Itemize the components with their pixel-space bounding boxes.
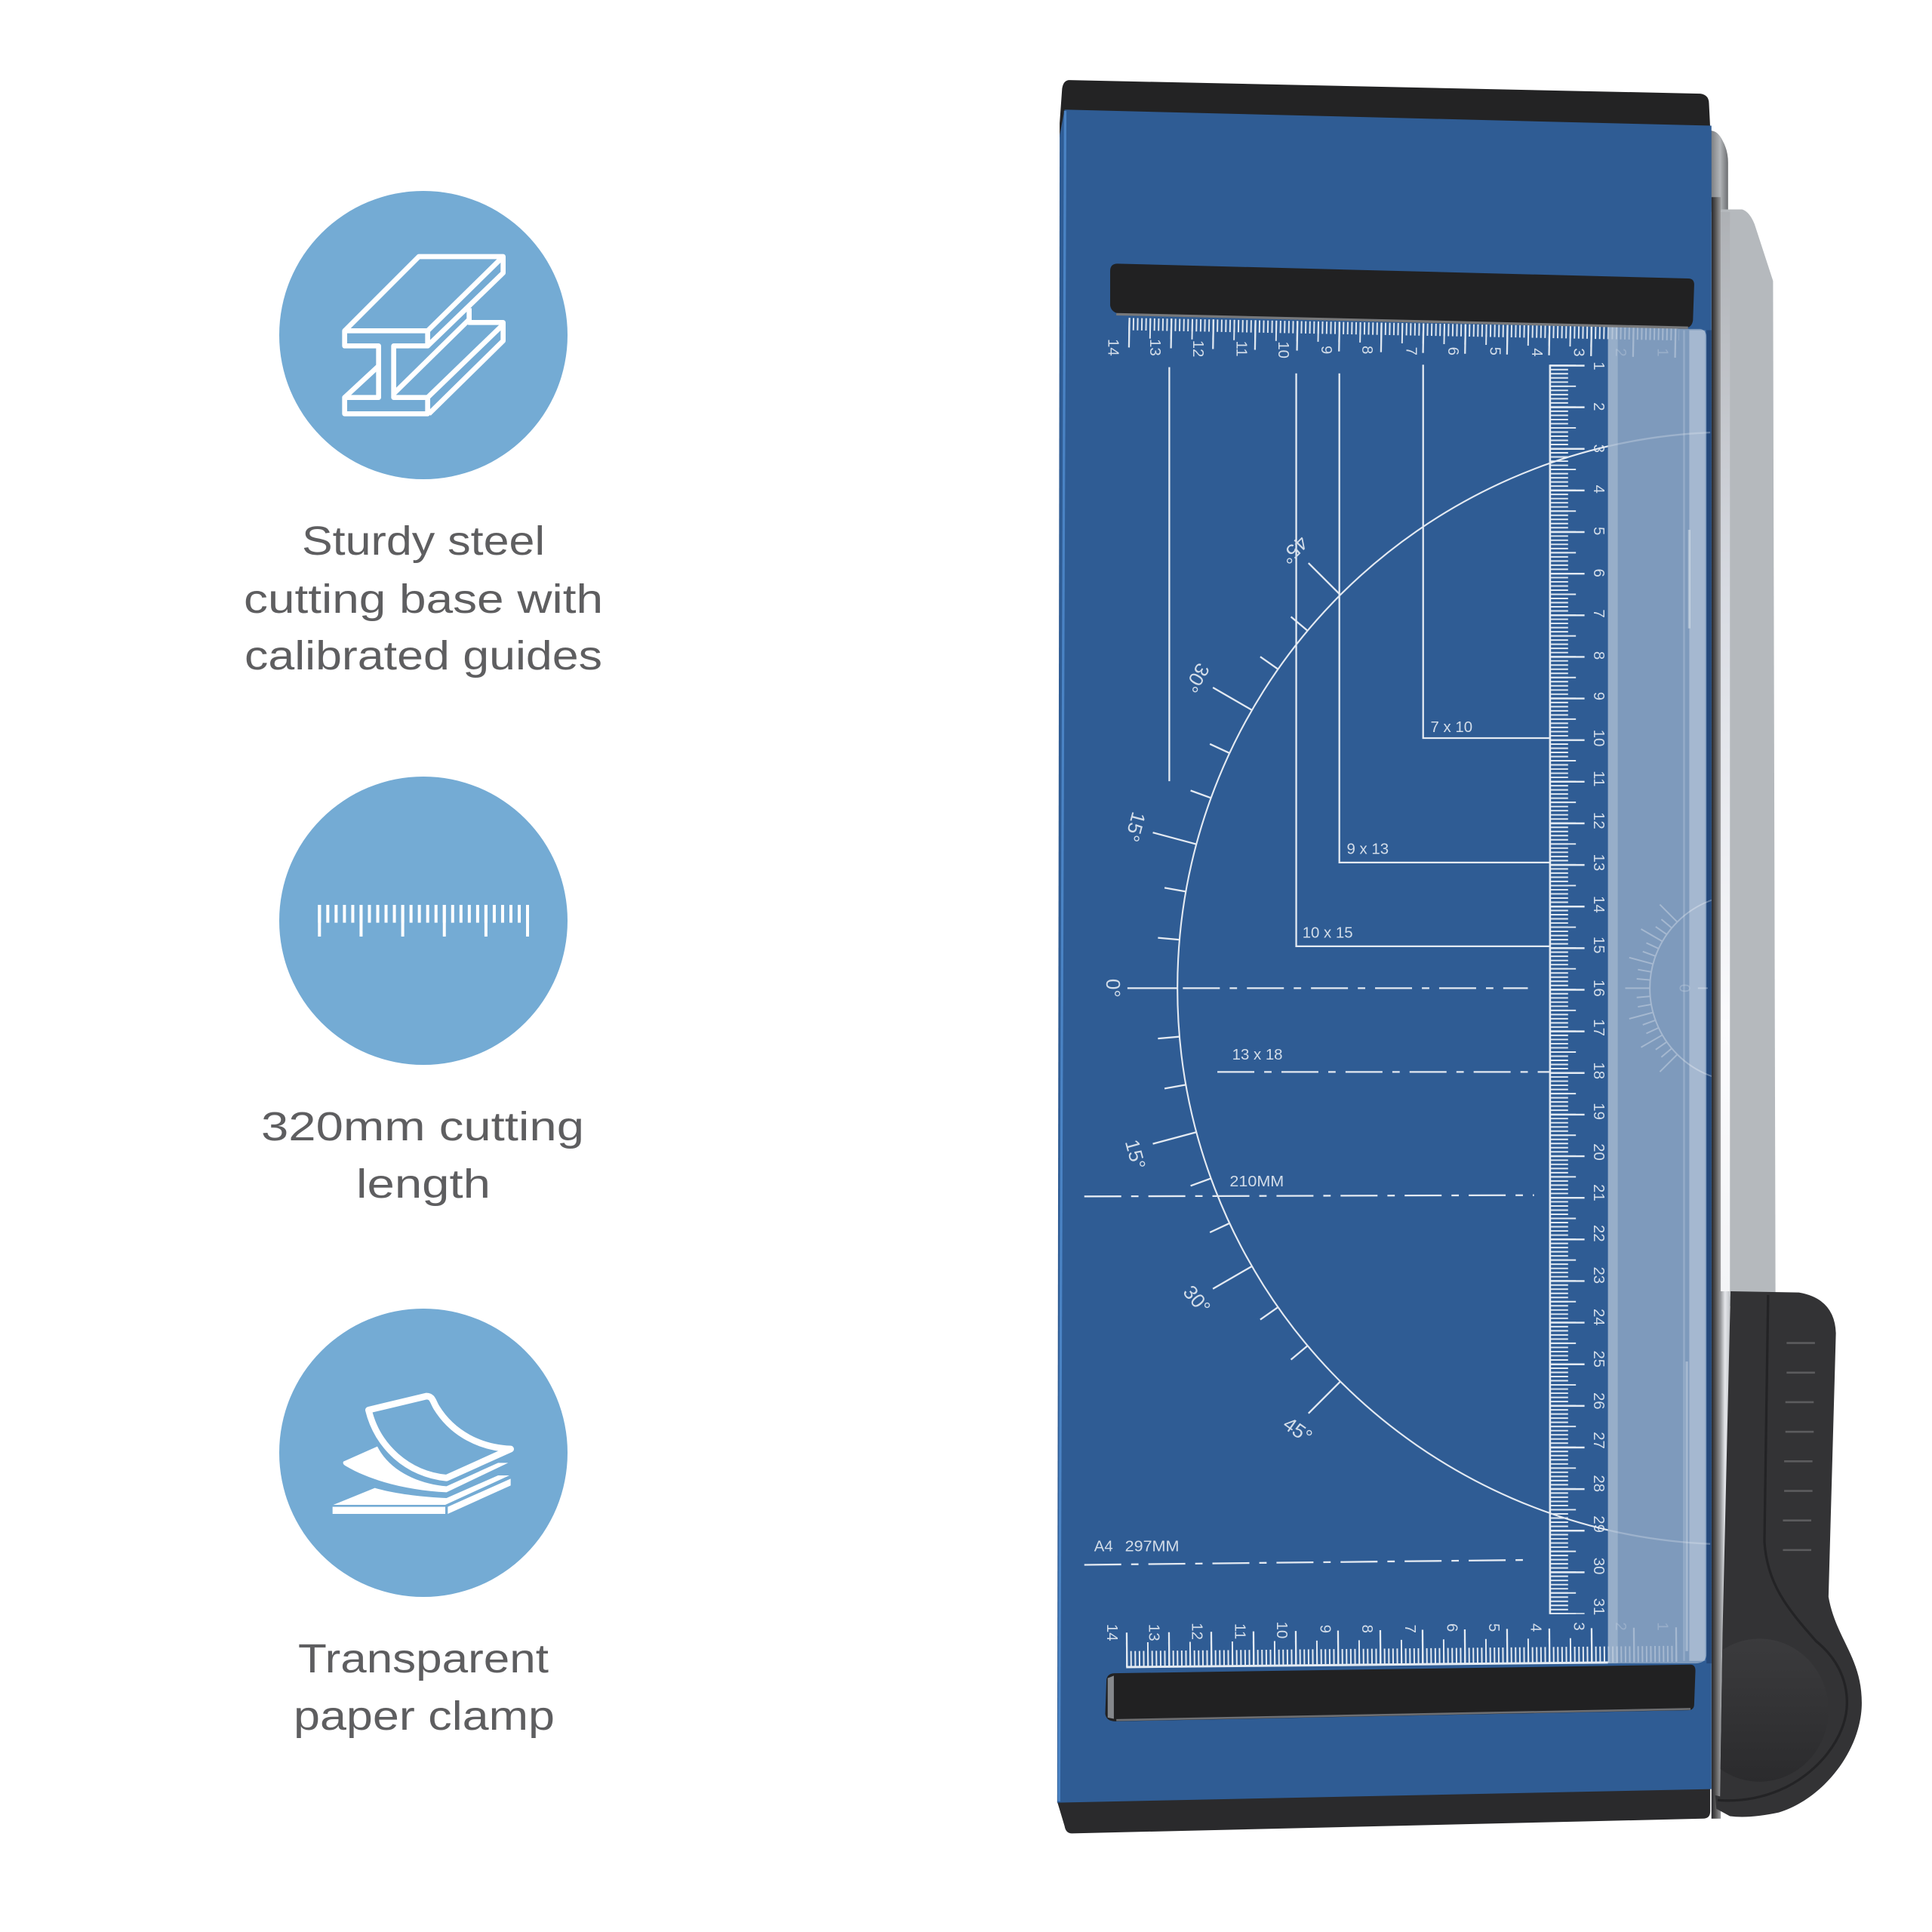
handle thumb dimple [1721,1650,1722,1769]
protractor angle labels: 45° [1279,1412,1316,1447]
vertical ruler numbers: 10 [1590,730,1607,746]
size labels: 9 x 13 [1346,841,1389,857]
bottom ruler numbers: 6 [1444,1623,1460,1632]
caption: steel base [244,518,603,678]
top ruler numbers: 14 [1105,339,1121,356]
markings seen through clamp: 2 [1612,348,1629,357]
bottom ruler numbers: 4 [1527,1623,1544,1632]
vertical ruler numbers: 5 [1590,527,1607,535]
caption: clamp: paper clamp [294,1694,555,1739]
top ruler numbers: 5 [1487,347,1503,355]
vertical ruler numbers: 9 [1590,692,1607,700]
vertical ruler numbers: 13 [1590,854,1607,871]
bottom ruler numbers: 7 [1401,1625,1418,1633]
vertical ruler numbers: 8 [1590,651,1607,660]
vertical ruler numbers: 28 [1590,1475,1607,1492]
bottom ruler numbers: 11 [1232,1623,1248,1639]
protractor angle labels: 15° [1121,1137,1150,1172]
size labels: 10 x 15 [1303,924,1353,941]
caption: cutting length [261,1104,584,1207]
protractor angle labels [1102,531,1316,1447]
size labels: A4 [1094,1539,1113,1555]
bottom ruler numbers: 8 [1358,1625,1375,1633]
markings seen through clamp: 0 [1675,984,1692,992]
bottom ruler numbers: 5 [1485,1623,1502,1632]
circle badge: steel [279,191,568,479]
top ruler numbers: 3 [1571,348,1587,357]
transparent paper clamp [1608,325,1712,1663]
dash-dot guide lines [1084,988,1550,1564]
bottom ruler numbers: 9 [1316,1625,1333,1633]
protractor angle labels: 15° [1121,810,1150,844]
feature: steel cutting base [244,191,603,678]
vertical ruler numbers: 25 [1590,1350,1607,1367]
protractor angle labels: 30° [1180,660,1214,697]
vertical ruler numbers: 11 [1590,771,1607,786]
vertical ruler numbers: 23 [1590,1266,1607,1284]
bottom ruler [1126,1644,1679,1667]
vertical ruler numbers: 30 [1590,1558,1607,1574]
icon: steel I-beam [345,257,503,414]
top clamp bar [1110,263,1694,328]
vertical ruler numbers: 4 [1590,485,1607,494]
bottom ruler numbers: 3 [1571,1622,1587,1631]
vertical ruler numbers: 17 [1590,1019,1607,1036]
caption: steel base: cutting base with [244,577,603,622]
printed scales and guides [1084,324,1710,1667]
protractor angle labels: 45° [1275,531,1312,568]
bottom ruler numbers: 12 [1189,1623,1205,1640]
protractor arc [1177,445,1608,1531]
circle badge: clamp [279,1309,568,1597]
top ruler numbers: 13 [1146,339,1163,356]
vertical ruler numbers: 7 [1590,609,1607,618]
markings seen through clamp: 2 [1612,1622,1629,1631]
markings seen through clamp: 1 [1654,1622,1671,1631]
bottom black end cap [1057,1788,1710,1833]
vertical ruler numbers: 26 [1590,1392,1607,1410]
size guide lines [1169,365,1550,946]
top ruler numbers: 6 [1444,347,1461,355]
circle badge: length [279,777,568,1065]
protractor ticks [1128,563,1340,1414]
protractor angle labels: 30° [1179,1281,1215,1318]
vertical ruler numbers: 22 [1590,1225,1607,1242]
top ruler numbers: 10 [1275,341,1291,358]
vertical ruler numbers: 16 [1590,980,1607,997]
vertical ruler numbers: 31 [1590,1598,1607,1615]
vertical ruler numbers: 20 [1590,1143,1607,1161]
bottom ruler numbers: 13 [1145,1624,1161,1641]
product: paper cutter [1057,80,1862,1833]
caption: cutting length: 320mm cutting [261,1104,584,1149]
feature: transparent clamp [279,1309,568,1739]
size labels: 210MM [1229,1174,1284,1190]
markings seen through clamp: 1 [1654,348,1671,357]
top ruler numbers [1105,339,1587,358]
icon: stacked paper [333,1396,511,1514]
size labels: 7 x 10 [1431,719,1472,736]
top ruler numbers: 7 [1403,347,1420,355]
vertical ruler numbers: 1 [1590,361,1607,371]
black handle [1715,1291,1862,1817]
metal rail at right [1710,131,1776,1819]
size labels [1094,719,1472,1555]
top ruler numbers: 12 [1189,340,1206,357]
top ruler numbers: 11 [1232,340,1249,357]
feature: cutting length [261,777,584,1207]
top ruler numbers: 4 [1528,348,1545,357]
vertical ruler numbers: 12 [1590,812,1607,829]
blue base plate [1057,109,1712,1803]
bottom clamp bar [1105,1665,1696,1721]
vertical ruler numbers: 14 [1590,896,1607,913]
markings seen through clamp [1607,328,1712,1663]
caption: cutting length: length [356,1161,491,1207]
vertical ruler numbers: 21 [1590,1184,1607,1201]
icon: ruler [318,914,529,921]
top ruler numbers: 8 [1358,346,1375,354]
top ruler numbers: 9 [1318,346,1334,354]
handle groove [1718,1295,1847,1801]
caption: steel base: Sturdy steel [302,518,545,564]
vertical ruler [1550,365,1567,1614]
vertical ruler numbers: 2 [1590,402,1607,411]
vertical ruler numbers: 15 [1590,937,1607,954]
protractor angle labels: 0° [1102,979,1124,998]
vertical ruler numbers [1594,362,1604,1615]
vertical ruler numbers: 6 [1590,569,1607,577]
size labels: 297MM [1125,1539,1179,1555]
vertical ruler numbers: 27 [1590,1432,1607,1449]
vertical ruler numbers: 18 [1590,1062,1607,1079]
handle grip lines [1783,1343,1815,1550]
bottom ruler numbers: 10 [1273,1622,1290,1638]
bottom ruler numbers: 14 [1103,1624,1120,1641]
top ruler [1128,324,1679,343]
bottom ruler numbers [1103,1622,1587,1641]
size labels: 13 x 18 [1232,1047,1283,1063]
top black end cap [1060,80,1710,138]
caption: clamp [294,1636,555,1739]
vertical ruler numbers: 24 [1590,1309,1607,1326]
vertical ruler numbers: 19 [1590,1103,1607,1120]
vertical ruler numbers: 3 [1590,445,1607,453]
caption: clamp: Transparent [298,1636,549,1681]
vertical ruler numbers: 29 [1590,1515,1607,1533]
caption: steel base: calibrated guides [245,633,602,678]
